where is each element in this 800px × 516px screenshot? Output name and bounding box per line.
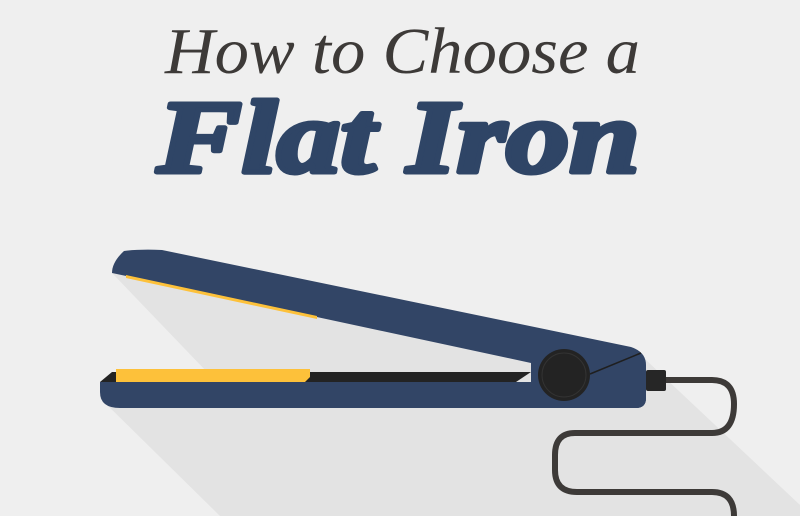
illustration: flat iron xyxy=(100,250,734,516)
temperature dial xyxy=(538,349,590,401)
power cord xyxy=(555,370,734,516)
long shadow xyxy=(100,273,800,516)
upper arm xyxy=(112,250,646,408)
plate: upper xyxy=(126,275,317,319)
title: Flat Iron: Flat Iron xyxy=(156,80,640,195)
title: How to Choose a: How to Choose a xyxy=(164,15,640,88)
plate: lower xyxy=(116,369,310,382)
lower arm xyxy=(100,369,646,408)
